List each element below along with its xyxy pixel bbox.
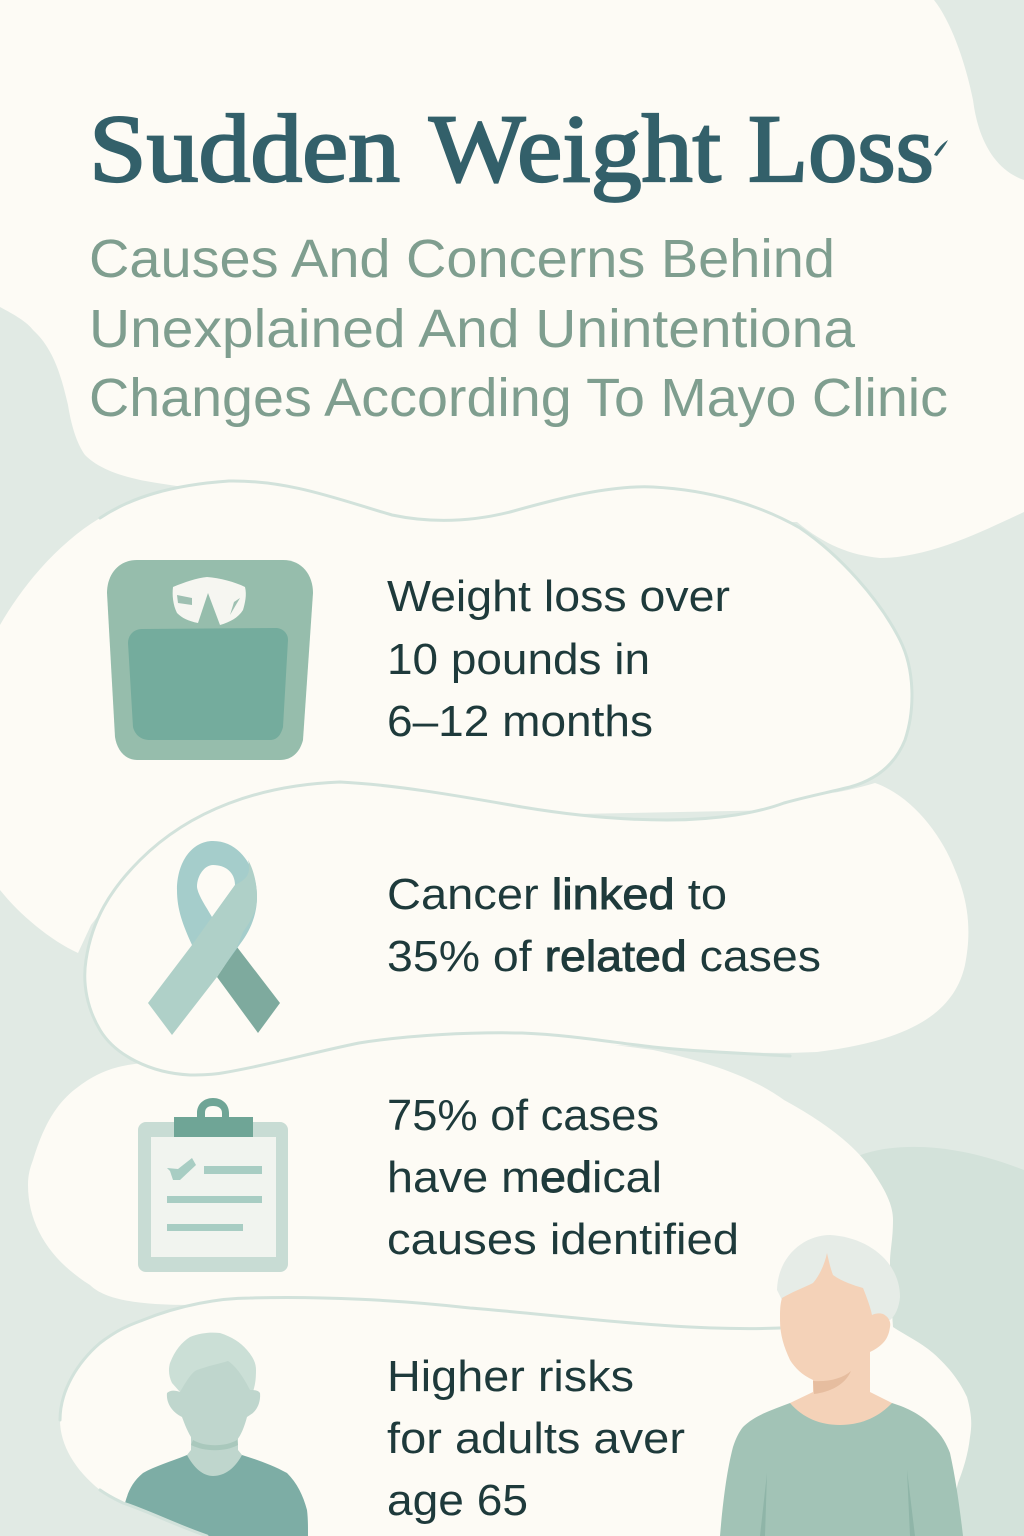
- icon: awareness ribbon: [148, 841, 280, 1035]
- subtitle: Unexplained And Unintentiona: [89, 299, 856, 359]
- title: Weight: [429, 95, 721, 202]
- text: medical causes: [387, 1091, 739, 1264]
- subtitle: Causes And Concerns Behind: [89, 229, 835, 289]
- subtitle: [89, 229, 948, 428]
- text: cancer: [387, 870, 821, 981]
- illustration: older person: [720, 1235, 963, 1536]
- text: cancer: Cancer linked to: [387, 870, 727, 919]
- text: higher risks: Higher risks: [387, 1352, 634, 1401]
- title: Sudden: [89, 95, 400, 202]
- text: higher risks: age 65: [387, 1476, 528, 1525]
- card outlines: [60, 481, 912, 1420]
- text: weight loss: 6–12 months: [387, 697, 653, 746]
- icon: younger person: [125, 1333, 308, 1536]
- text: cancer: 35% of related cases: [387, 932, 821, 981]
- panel: older adults card: [60, 1297, 971, 1536]
- panel: weight loss card: [0, 481, 912, 953]
- text: higher risks: [387, 1352, 685, 1525]
- subtitle: Changes According To Mayo Clinic: [89, 368, 948, 428]
- text: medical causes: 75% of cases: [387, 1091, 659, 1140]
- text: medical causes: causes identified: [387, 1215, 739, 1264]
- text: weight loss: 10 pounds in: [387, 635, 650, 684]
- text: weight loss: Weight loss over: [387, 572, 730, 621]
- panel: cancer card: [85, 782, 968, 1075]
- card outline: lower left: [100, 1490, 207, 1536]
- icon: weighing scale: [107, 560, 313, 760]
- text: medical causes: have medical: [387, 1153, 662, 1202]
- title: [89, 95, 948, 202]
- text: weight loss: [387, 572, 730, 746]
- title: Loss: [748, 95, 934, 202]
- text: higher risks: for adults aver: [387, 1414, 685, 1463]
- panel: medical causes card: [28, 1033, 893, 1335]
- icon: clipboard: [138, 1098, 288, 1272]
